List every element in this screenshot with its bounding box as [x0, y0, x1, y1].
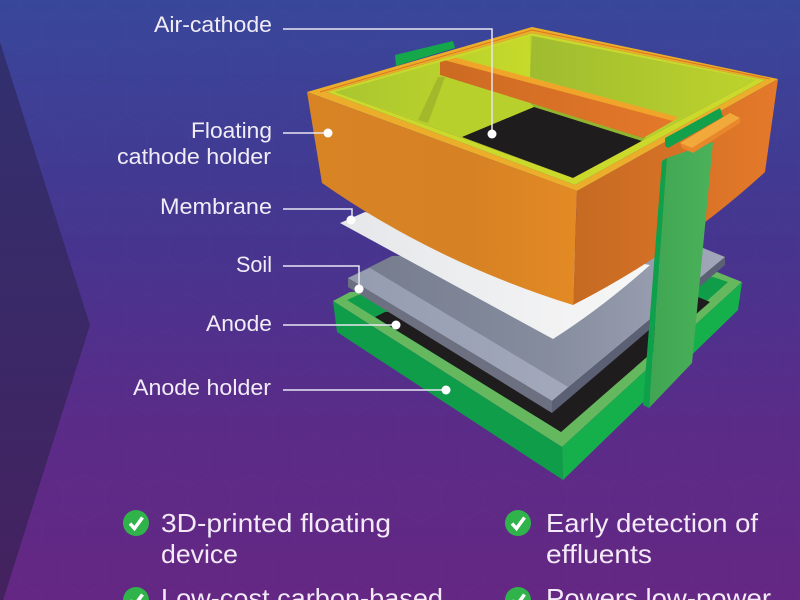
- label: membrane: Membrane: [160, 194, 272, 219]
- floor edge: [530, 103, 646, 141]
- floating cathode holder: [307, 27, 778, 305]
- rim: [307, 27, 778, 191]
- orange tab: [680, 113, 740, 153]
- label: air-cathode: [154, 12, 496, 138]
- front face: [307, 92, 577, 305]
- interior: [335, 36, 755, 178]
- back holder tab: [395, 41, 455, 66]
- label: air-cathode: Air-cathode: [154, 12, 272, 37]
- anode: [375, 297, 710, 432]
- anode holder: [333, 272, 742, 480]
- green connector strip: [643, 142, 713, 408]
- label: floating cathode holder: cathode holder: [117, 144, 271, 169]
- air-cathode: [462, 107, 642, 178]
- membrane: [340, 212, 650, 339]
- dark chevron shape: [0, 42, 90, 600]
- right face: [573, 79, 778, 305]
- green tab: [665, 108, 723, 148]
- label: soil: [236, 252, 364, 294]
- feature: early detection of effluents: effluents: [546, 539, 652, 569]
- feature: 3D-printed floating device: [123, 508, 391, 569]
- soil layer: [348, 248, 725, 413]
- feature: early detection of effluents: Early detection of: [546, 508, 759, 538]
- label: floating cathode holder: Floating: [191, 118, 272, 143]
- label: soil: Soil: [236, 252, 272, 277]
- label: floating cathode holder: [117, 118, 332, 169]
- label: anode holder: [133, 375, 450, 400]
- fuel cell diagram: [307, 27, 778, 480]
- feature: 3D-printed floating device: device: [161, 539, 238, 569]
- feature: early detection of effluents: [505, 508, 759, 569]
- label: anode: Anode: [206, 311, 272, 336]
- label: membrane: [160, 194, 356, 224]
- label: anode: [206, 311, 400, 336]
- feature: 3D-printed floating device: 3D-printed floating: [161, 508, 391, 538]
- cross bar: [439, 55, 678, 138]
- label: anode holder: Anode holder: [133, 375, 271, 400]
